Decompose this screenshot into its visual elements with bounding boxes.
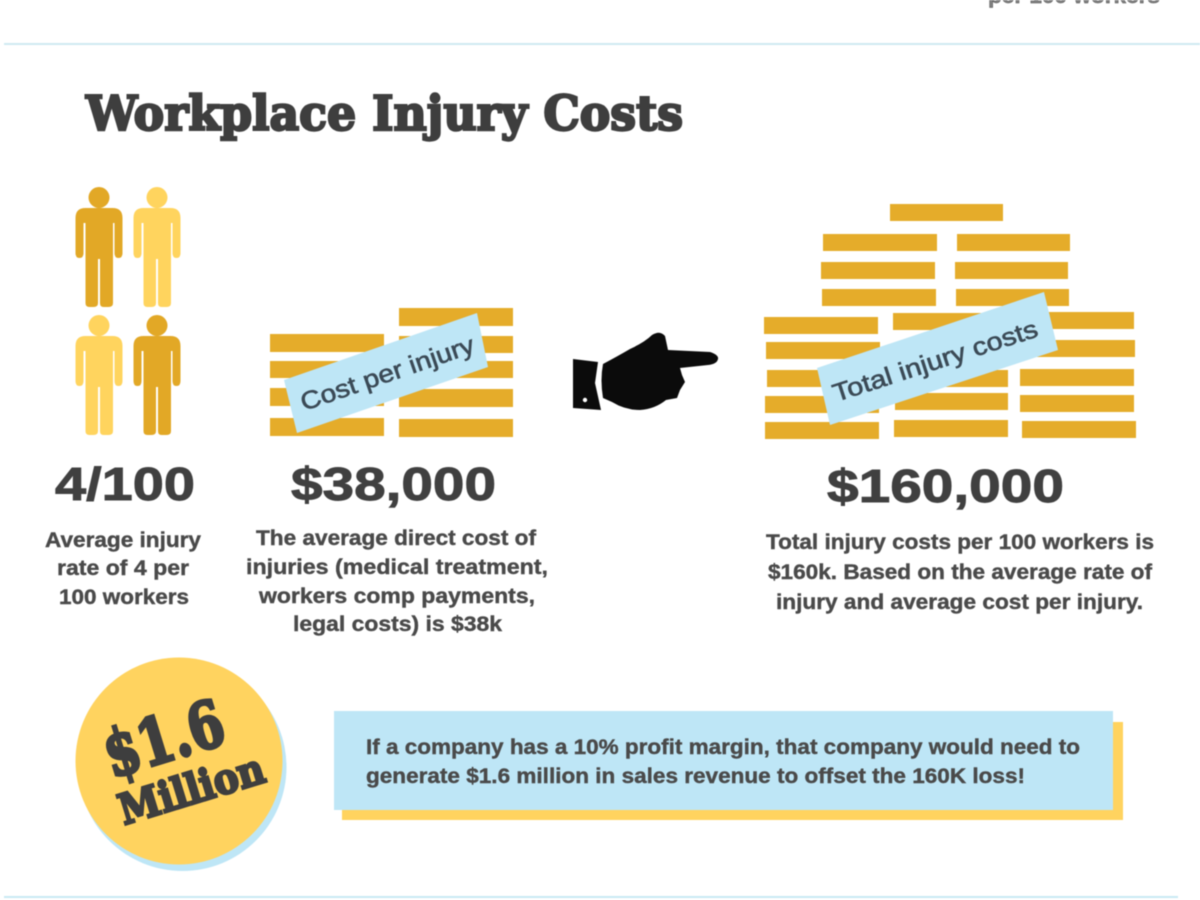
stat: injury rate: 4/100: [55, 458, 195, 510]
stat: cost per injury: [246, 458, 548, 636]
icon group: four people showing injury rate: [76, 187, 180, 435]
label: cost per injury: Cost per injury: [297, 331, 479, 417]
icon: small stack of gold bars with cost per injury label: [270, 308, 513, 437]
description: injury rate: rate of 4 per: [57, 557, 189, 580]
person 2: uninjured: [134, 187, 180, 307]
description: cost per injury: [246, 527, 548, 636]
stat: injury rate: [45, 458, 201, 609]
callout: sales revenue needed: [334, 711, 1123, 820]
stat: total injury costs: $160,000: [827, 460, 1064, 512]
badge: $1.6 million: $1.6: [95, 686, 233, 793]
description: injury rate: Average injury: [45, 529, 201, 552]
callout: sales revenue needed: If a company has a 10% profit margin, that company would need to: [366, 736, 1080, 759]
stat: cost per injury: $38,000: [291, 458, 496, 510]
description: total injury costs: injury and average cost per injury.: [776, 591, 1143, 614]
description: cost per injury: injuries (medical treatment,: [246, 556, 548, 579]
title: Workplace Injury Costs: [85, 86, 683, 142]
label: total injury costs: [817, 292, 1058, 425]
description: injury rate: 100 workers: [59, 586, 189, 609]
icon: pointing hand: [573, 333, 718, 410]
description: cost per injury: The average direct cost of: [256, 527, 537, 550]
badge: $1.6 million: Million: [113, 744, 270, 835]
description: total injury costs: [766, 531, 1154, 614]
person 4: injured: [134, 315, 180, 435]
callout: sales revenue needed: generate $1.6 million in sales revenue to offset the 160K loss!: [366, 765, 1025, 788]
description: injury rate: [45, 529, 201, 609]
label: total injury costs: Total injury costs: [829, 315, 1041, 408]
person 3: uninjured: [76, 315, 122, 435]
label: cost per injury: [284, 313, 488, 433]
icon: large pile of gold bars with total injury costs label: [764, 204, 1136, 439]
person 1: injured: [76, 187, 122, 307]
description: cost per injury: legal costs) is $38k: [293, 613, 502, 636]
stat: total injury costs: [766, 460, 1154, 614]
description: total injury costs: Total injury costs per 100 workers is: [766, 531, 1154, 554]
description: total injury costs: $160k. Based on the average rate of: [768, 561, 1153, 584]
description: cost per injury: workers comp payments,: [258, 585, 535, 608]
badge: $1.6 million: [76, 658, 286, 871]
